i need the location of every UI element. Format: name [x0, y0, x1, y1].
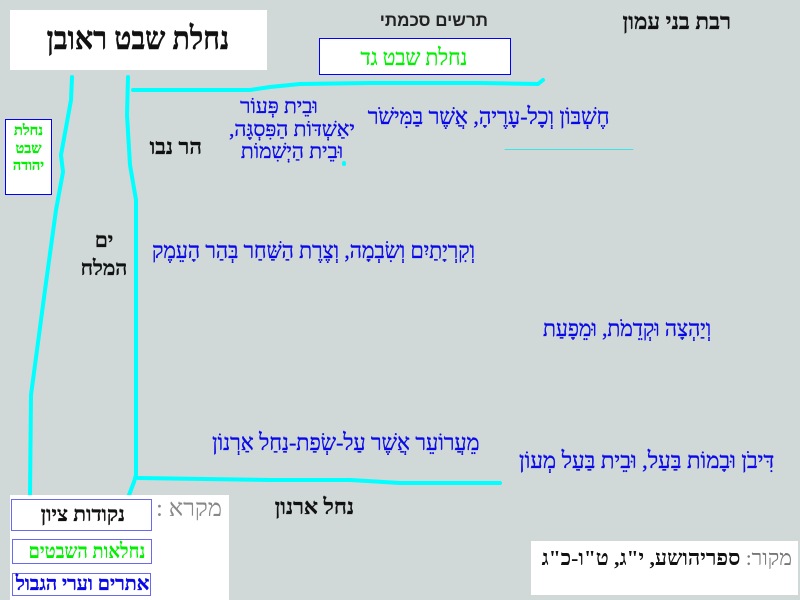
box: Gad tribe: [319, 38, 511, 75]
label: Beit Peor group: [229, 94, 355, 163]
title: Reuben tribe: [10, 10, 267, 70]
label: Arnon stream: נחל ארנון: [275, 494, 354, 519]
panel: source: [531, 541, 798, 595]
label: Rabbat Bnei Ammon: רבת בני עמון: [622, 9, 731, 34]
label: Mount Nebo: הר נבו: [150, 134, 202, 159]
legend: tribal inheritances: נחלאות השבטים: [28, 539, 145, 563]
panel: legend: [10, 495, 229, 600]
label: Kiryatayim: וְקִרְיָתַיִם וְשִׂבְמָה, וְצֶרֶת הַשַּׁחַר בְּהַר הָעֵמֶק: [152, 238, 475, 263]
label: Dead Sea: [81, 228, 127, 280]
label: Dead Sea: ים: [95, 228, 113, 252]
box: Judah tribe: [5, 119, 52, 195]
legend: border sites and cities: אתרים וערי הגבול: [15, 573, 149, 595]
legend heading: מקרא :: [156, 496, 222, 522]
label: Dibon: דִּיבֹן וּבָמוֹת בַּעַל, וּבֵית בַּעַל מְעוֹן: [519, 448, 774, 473]
label: Beit Peor group: יאַשְׁדּוֹת הַפִּסְגָּה,: [229, 116, 355, 140]
source text: מקור: ספריהושע, י"ג, ט"ו-כ"ג: [542, 546, 792, 570]
legend: points of interest: נקודות ציון: [41, 502, 125, 526]
label: Aroer: מֵעֲרוֹעֵר אֲשֶׁר עַל-שְׂפַת-נַחַל אַרְנוֹן: [212, 430, 479, 455]
box: Judah tribe: נחלת: [14, 123, 43, 139]
label: Dead Sea: המלח: [81, 256, 127, 280]
box: Judah tribe: יהודה: [13, 158, 44, 174]
label: Heshbon: חֶשְׁבּוֹן וְכָל-עָרֶיהָ, אֲשֶׁר בַּמִּישֹׁר: [368, 104, 610, 129]
title: Reuben tribe: נחלת שבט ראובן: [46, 20, 229, 56]
label: Beit Peor group: וּבֵית הַיְשִׁמוֹת: [241, 139, 343, 163]
label: Yahatz: וְיַהְצָה וּקְדֵמֹת, וּמֵפָעַת: [543, 316, 711, 341]
box: Judah tribe: שבט: [15, 140, 42, 156]
box: Gad tribe: נחלת שבט גד: [360, 45, 467, 70]
label: Beit Peor group: וּבֵית פְּעוֹר: [240, 94, 318, 118]
legend: points of interest: [11, 499, 152, 531]
note: schematic drawing: תרשים סכמתי: [380, 11, 488, 30]
